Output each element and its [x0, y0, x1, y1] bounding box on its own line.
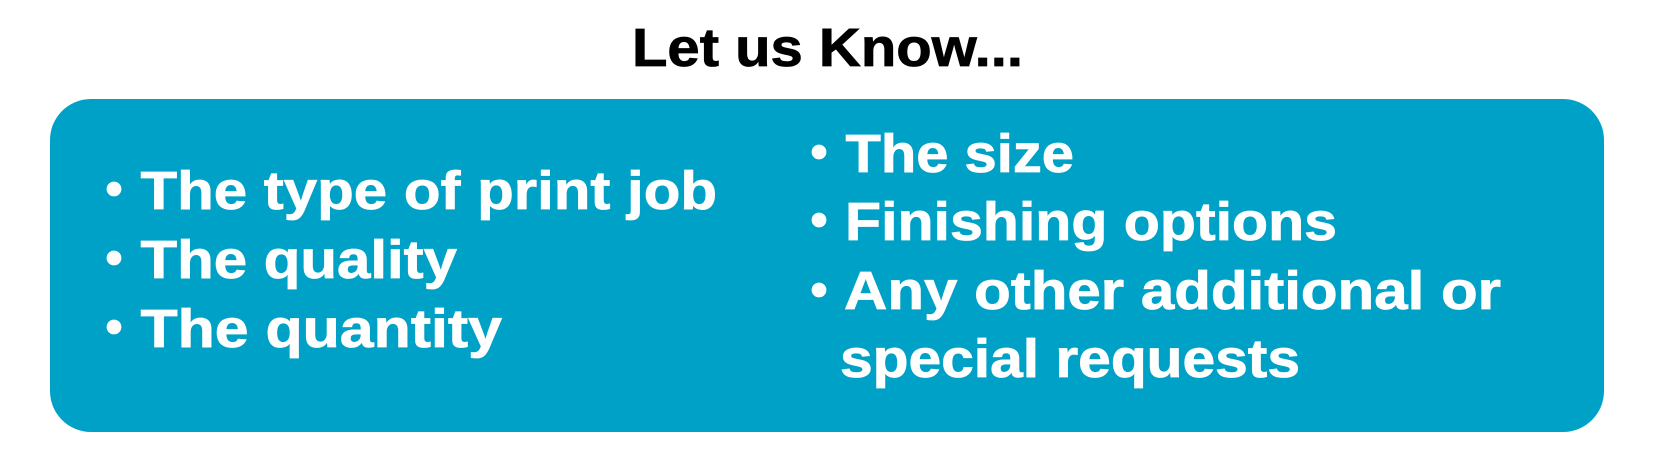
panel: request details	[50, 99, 1604, 432]
right column list	[812, 124, 1501, 389]
item: quality: The quality	[140, 230, 457, 290]
left column list	[107, 161, 717, 359]
item: size: The size	[846, 124, 1074, 184]
item: additional or special requests: Any other additional or	[844, 261, 1501, 321]
panel background	[50, 99, 1604, 432]
item: type of print job: The type of print job	[140, 161, 717, 221]
item: quantity: The quantity	[140, 299, 502, 359]
item: finishing options: Finishing options	[845, 192, 1337, 252]
item: additional or special requests	[812, 261, 1501, 389]
item: additional or special requests: special requests	[840, 329, 1300, 389]
title: Let us Know...	[632, 18, 1023, 78]
